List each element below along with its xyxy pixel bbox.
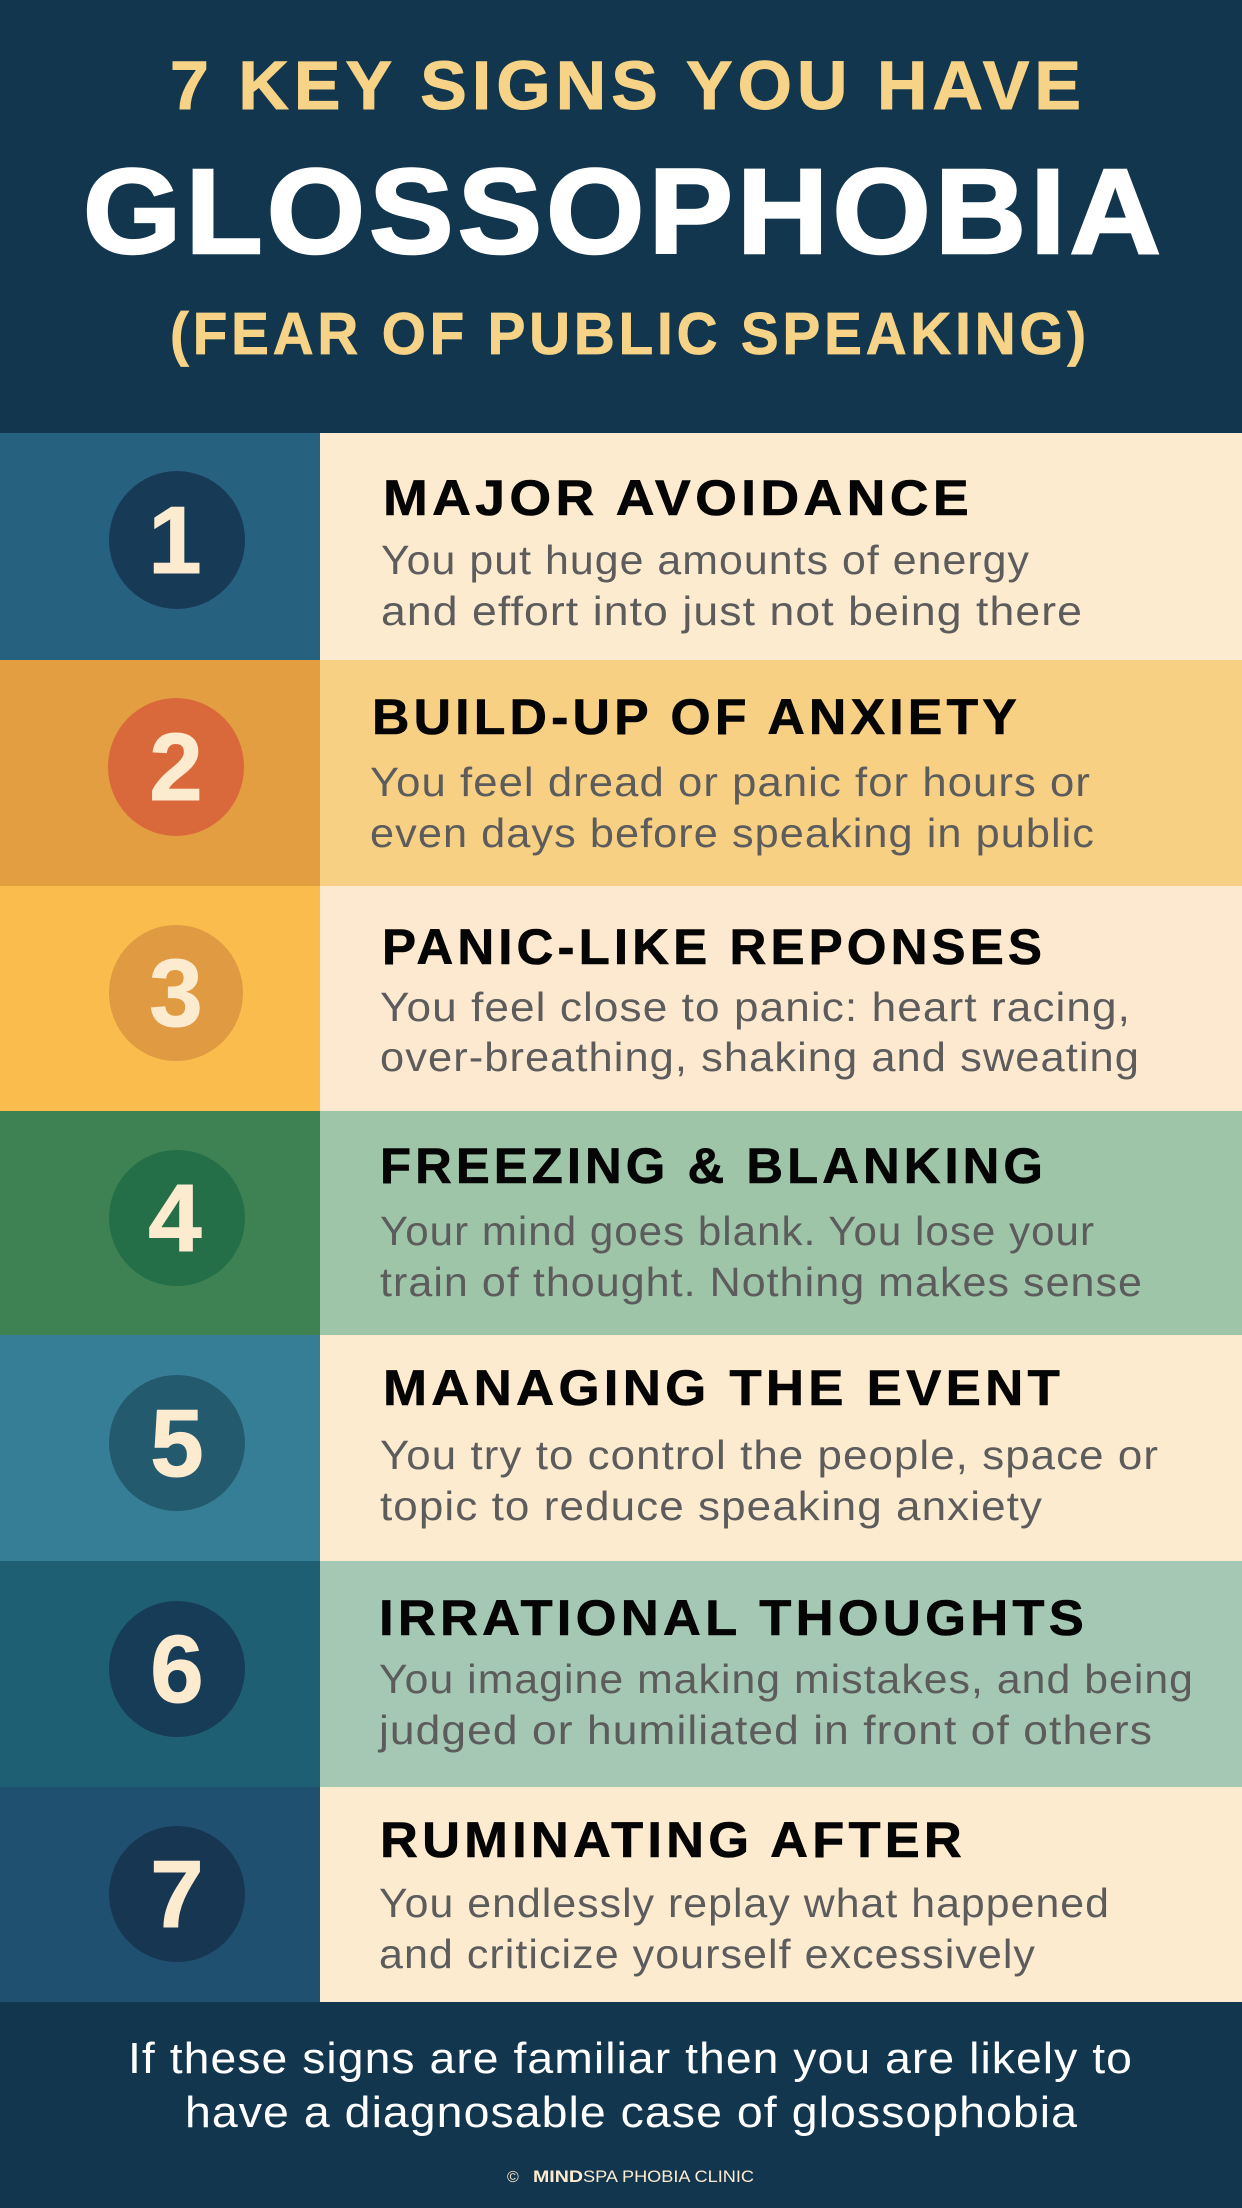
number badge 6	[109, 1601, 245, 1737]
number badge 5: 5	[150, 1390, 204, 1497]
closing statement: have a diagnosable case of glossophobia	[185, 2088, 1078, 2137]
number badge 1	[109, 471, 245, 609]
sign 5 text: You try to control the people, space or	[380, 1432, 1159, 1478]
sign 2 heading: BUILD-UP OF ANXIETY	[372, 689, 1021, 745]
number badge 2	[108, 698, 244, 836]
sign 5 heading: MANAGING THE EVENT	[383, 1360, 1064, 1416]
sign 3 heading: PANIC-LIKE REPONSES	[382, 919, 1046, 975]
closing statement	[128, 2034, 1133, 2137]
sign 1 text: You put huge amounts of energy	[381, 537, 1030, 583]
header panel	[0, 0, 1242, 433]
number badge 3: 3	[149, 940, 203, 1047]
number badge 2: 2	[149, 714, 203, 821]
copyright credit: MIND	[533, 2167, 583, 2186]
number badge 7	[109, 1826, 245, 1962]
panel: sign 4	[0, 1111, 1242, 1335]
sign 4 text	[380, 1208, 1143, 1305]
title line: 7 key signs: 7 KEY SIGNS YOU HAVE	[170, 47, 1086, 124]
closing statement: If these signs are familiar then you are likely to	[128, 2034, 1133, 2083]
sign 1 text	[381, 537, 1083, 634]
sign 3 text: over-breathing, shaking and sweating	[380, 1034, 1140, 1080]
sign 1 text: and effort into just not being there	[381, 588, 1083, 634]
sign 6 text: You imagine making mistakes, and being	[379, 1656, 1194, 1702]
copyright credit	[507, 2167, 754, 2186]
panel: sign 5	[0, 1335, 1242, 1561]
sign 7 text: You endlessly replay what happened	[379, 1880, 1110, 1926]
number badge 4: 4	[148, 1165, 202, 1272]
sign 2 text	[370, 759, 1095, 856]
sign 4 text: Your mind goes blank. You lose your	[380, 1208, 1095, 1254]
copyright credit: SPA PHOBIA CLINIC	[583, 2167, 754, 2186]
sign 6 text	[378, 1656, 1194, 1753]
sign 3 text	[380, 984, 1140, 1080]
sign 7 text	[379, 1880, 1110, 1977]
panel: sign 2	[0, 660, 1242, 886]
number badge 4	[109, 1150, 245, 1286]
panel: sign 6	[0, 1561, 1242, 1787]
sign 4 heading: FREEZING & BLANKING	[380, 1138, 1047, 1194]
footer panel	[0, 2002, 1242, 2208]
sign 4 text: train of thought. Nothing makes sense	[380, 1259, 1143, 1305]
panel: sign 1	[0, 433, 1242, 660]
number badge 7: 7	[150, 1841, 204, 1948]
panel: sign 3	[0, 886, 1242, 1111]
number badge 6: 6	[150, 1616, 204, 1723]
sign 6 text: judged or humiliated in front of others	[378, 1707, 1153, 1753]
sign 2 text: You feel dread or panic for hours or	[370, 759, 1091, 805]
sign 2 text: even days before speaking in public	[370, 810, 1095, 856]
number badge 5	[109, 1375, 245, 1511]
subtitle: (FEAR OF PUBLIC SPEAKING)	[170, 301, 1090, 367]
panel: sign 7	[0, 1787, 1242, 2002]
sign 5 text: topic to reduce speaking anxiety	[380, 1483, 1043, 1529]
number badge 3	[109, 925, 243, 1061]
sign 1 heading: MAJOR AVOIDANCE	[383, 470, 973, 526]
sign 7 text: and criticize yourself excessively	[379, 1931, 1036, 1977]
main title: glossophobia: GLOSSOPHOBIA	[83, 143, 1165, 279]
sign 3 text: You feel close to panic: heart racing,	[380, 984, 1131, 1030]
sign 7 heading: RUMINATING AFTER	[380, 1812, 966, 1868]
copyright credit: ©	[507, 2169, 519, 2186]
sign 5 text	[380, 1432, 1159, 1529]
sign 6 heading: IRRATIONAL THOUGHTS	[379, 1590, 1088, 1646]
number badge 1: 1	[148, 487, 202, 594]
